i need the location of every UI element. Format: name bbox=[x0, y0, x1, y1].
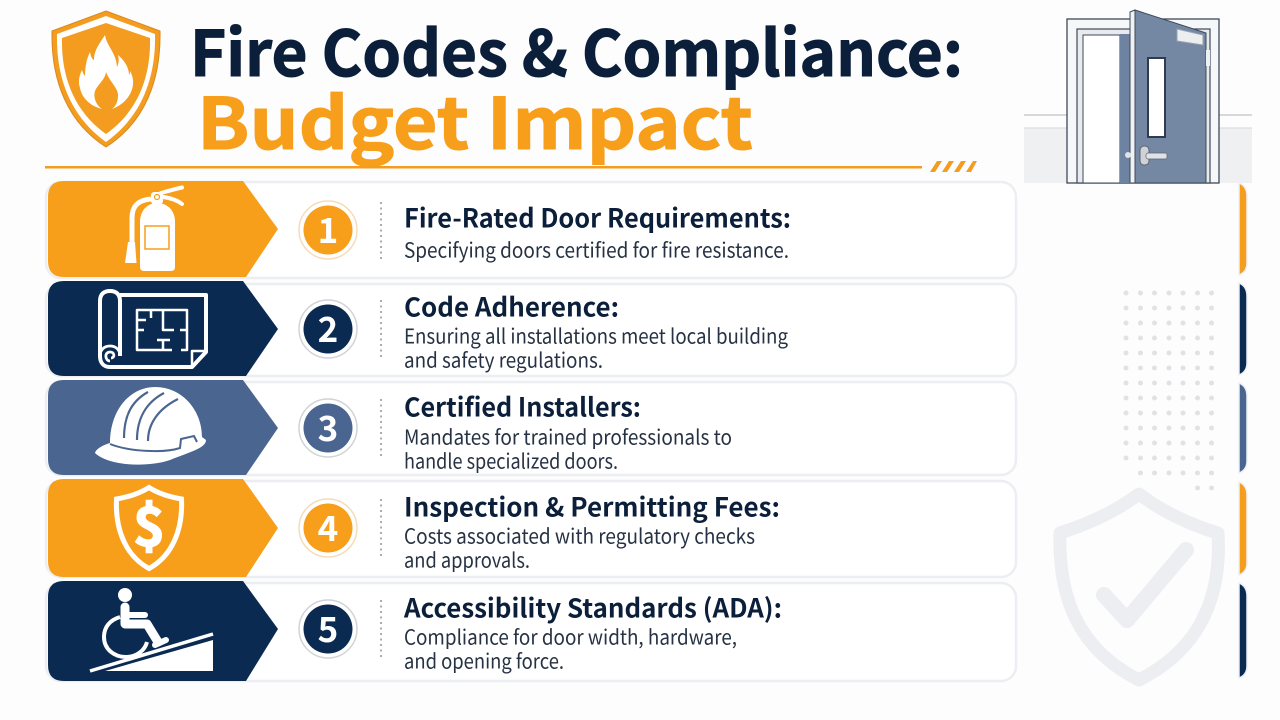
number badge 1 bbox=[299, 201, 357, 259]
icon: watermark shield with check bbox=[1060, 494, 1218, 680]
number badge 3: 3 bbox=[318, 401, 338, 452]
icon: shield with dollar sign: $ bbox=[133, 483, 165, 562]
heading and description: Ensuring all installations meet local building bbox=[404, 320, 788, 350]
title rule with slashes bbox=[45, 161, 977, 172]
number badge 5 bbox=[299, 600, 357, 658]
icon: fire shield logo bbox=[52, 11, 160, 147]
heading and description: Inspection & Permitting Fees: bbox=[404, 488, 780, 524]
number badge 3 bbox=[299, 399, 357, 457]
panel: accessibility standards bbox=[46, 581, 1016, 681]
panel: certified installers bbox=[46, 380, 1016, 475]
icon: door illustration bbox=[1024, 10, 1252, 183]
heading and description: Certified Installers: bbox=[404, 388, 641, 424]
right edge accent strips bbox=[1239, 183, 1247, 678]
decorative dot grid bbox=[1124, 290, 1214, 490]
icon: shield with dollar sign bbox=[116, 483, 182, 568]
heading and description bbox=[404, 198, 791, 264]
heading and description: and safety regulations. bbox=[404, 344, 603, 374]
title bbox=[190, 4, 963, 170]
icon: wheelchair on ramp bbox=[90, 588, 213, 671]
icon: fire extinguisher bbox=[125, 188, 182, 271]
number badge 2 bbox=[299, 300, 357, 358]
title: Budget Impact bbox=[197, 68, 753, 170]
number badge 4: 4 bbox=[318, 501, 338, 552]
panel: fire-rated door requirements bbox=[46, 181, 1016, 278]
number badge 2: 2 bbox=[318, 302, 338, 353]
heading and description: Mandates for trained professionals to bbox=[404, 420, 732, 450]
number badge 4 bbox=[299, 499, 357, 557]
panel: inspection and permitting fees bbox=[46, 479, 1016, 577]
heading and description bbox=[403, 588, 782, 674]
heading and description: Costs associated with regulatory checks bbox=[404, 520, 755, 550]
heading and description: Accessibility Standards (ADA): bbox=[403, 588, 782, 626]
icon: blueprint bbox=[100, 291, 206, 367]
heading and description bbox=[404, 388, 732, 474]
heading and description: Fire-Rated Door Requirements: bbox=[404, 198, 791, 236]
panel: code adherence bbox=[46, 281, 1016, 376]
title: Fire Codes & Compliance: bbox=[190, 4, 963, 95]
icon: hard hat bbox=[95, 387, 206, 465]
heading and description: handle specialized doors. bbox=[404, 444, 618, 474]
heading and description bbox=[404, 488, 780, 574]
heading and description: and approvals. bbox=[404, 544, 530, 574]
heading and description: Compliance for door width, hardware, bbox=[404, 620, 737, 650]
number badge 5: 5 bbox=[318, 602, 338, 653]
heading and description: Code Adherence: bbox=[404, 288, 619, 324]
number badge 1: 1 bbox=[318, 203, 338, 254]
heading and description: and opening force. bbox=[404, 644, 564, 674]
heading and description: Specifying doors certified for fire resistance. bbox=[404, 234, 789, 264]
heading and description bbox=[404, 288, 788, 374]
